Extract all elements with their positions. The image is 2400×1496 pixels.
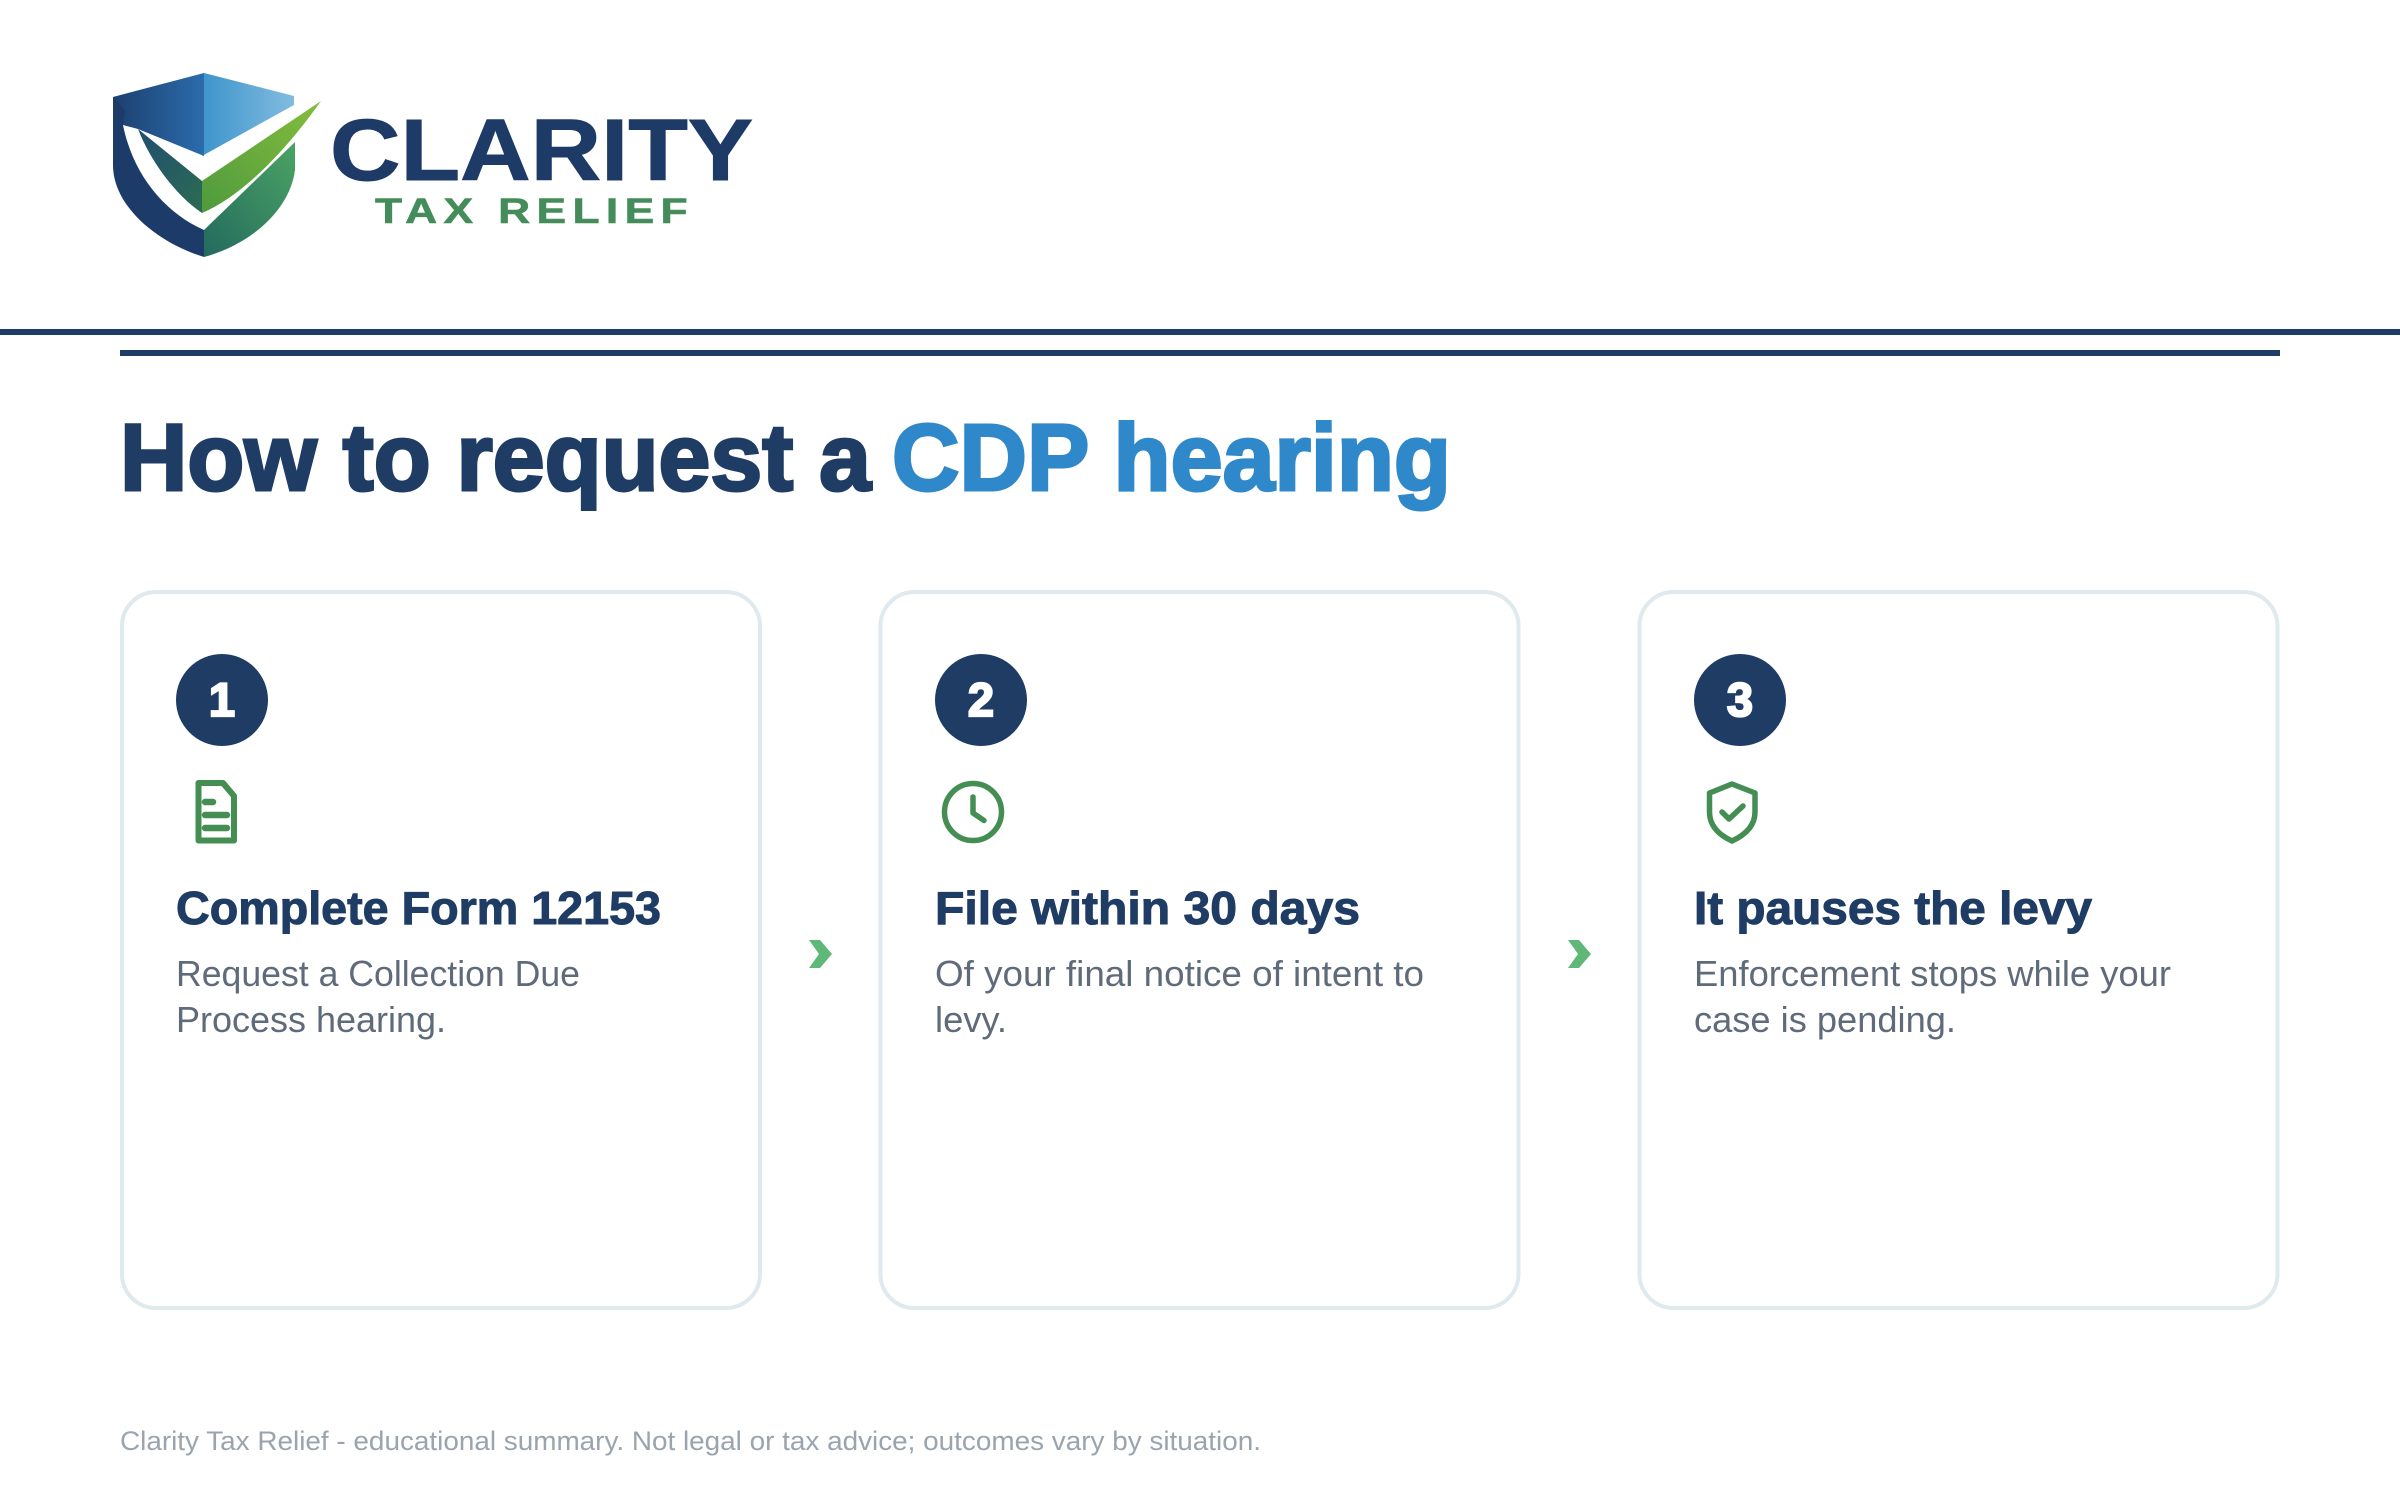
- icon: clock: [944, 784, 1002, 840]
- step 1 heading: Complete Form 12153: [176, 882, 661, 934]
- title: How to request a: [120, 405, 872, 511]
- step 1 description: [176, 953, 580, 1040]
- step 1 description: Process hearing.: [176, 999, 446, 1040]
- step 1 number badge: [176, 654, 268, 746]
- title: [120, 405, 1451, 511]
- footer disclaimer: Clarity Tax Relief - educational summary. Not legal or tax advice; outcomes vary by situation.: [120, 1426, 1261, 1456]
- step 3 description: [1694, 953, 2171, 1040]
- panel: step 1: [122, 592, 760, 1308]
- step 3 number badge: [1694, 654, 1786, 746]
- step 2 heading: File within 30 days: [935, 882, 1360, 934]
- logo: Clarity Tax Relief: [113, 73, 753, 257]
- step 3 number badge: 3: [1727, 673, 1753, 726]
- step 3 heading: It pauses the levy: [1694, 882, 2092, 934]
- step 2 number badge: [935, 654, 1027, 746]
- arrow: step 2 to 3: [1568, 940, 1591, 968]
- step 1 number badge: 1: [209, 673, 235, 726]
- logo wordmark: CLARITY: [330, 102, 753, 199]
- step 2 description: levy.: [935, 999, 1007, 1040]
- icon: document: [198, 783, 234, 840]
- title: CDP hearing: [892, 405, 1451, 511]
- panel: step 3: [1640, 592, 2278, 1308]
- step 3 description: case is pending.: [1694, 999, 1956, 1040]
- arrow: step 1 to 2: [809, 940, 832, 968]
- step 2 number badge: 2: [968, 673, 994, 726]
- step 2 description: [935, 953, 1424, 1040]
- icon: shield with check: [113, 73, 321, 257]
- logo tagline: TAX RELIEF: [375, 192, 694, 231]
- panel: step 2: [880, 592, 1518, 1308]
- step 2 description: Of your final notice of intent to: [935, 953, 1424, 994]
- icon: shield check: [1710, 784, 1755, 841]
- step 3 description: Enforcement stops while your: [1694, 953, 2171, 994]
- step 1 description: Request a Collection Due: [176, 953, 580, 994]
